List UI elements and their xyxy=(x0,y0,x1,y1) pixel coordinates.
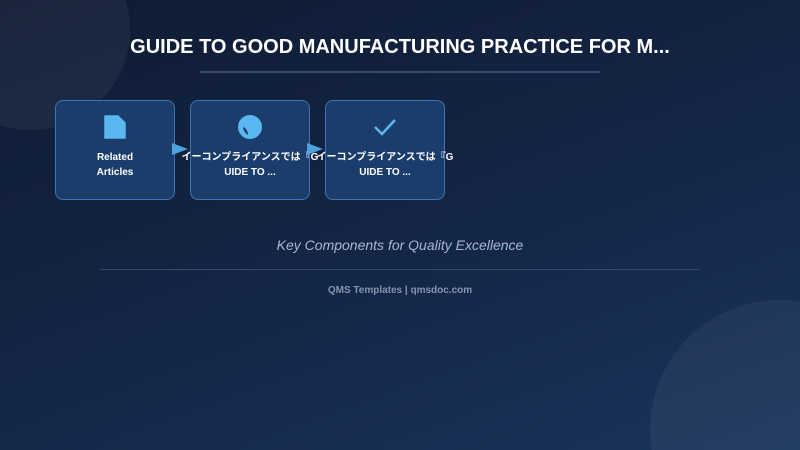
arrow xyxy=(172,143,188,155)
title: GUIDE TO GOOD MANUFACTURING PRACTICE FOR M... xyxy=(130,36,670,58)
panel: article 2 xyxy=(325,100,445,200)
subtitle: Key Components for Quality Excellence xyxy=(277,237,523,253)
text: article 1: イーコンプライアンスでは『G xyxy=(182,152,318,163)
text: article 2: UIDE TO ... xyxy=(359,167,411,178)
text: article 2: イーコンプライアンスでは『G xyxy=(317,152,453,163)
text: article 2 xyxy=(317,151,453,178)
panel: related articles xyxy=(55,100,175,200)
icon: check xyxy=(374,119,396,136)
footer: QMS Templates | qmsdoc.com xyxy=(328,285,472,296)
icon: document xyxy=(104,115,126,139)
text: article 1: UIDE TO ... xyxy=(224,167,276,178)
icon: globe xyxy=(238,115,262,139)
text: article 1 xyxy=(182,151,318,178)
arrow xyxy=(307,143,323,155)
panel: article 1 xyxy=(190,100,310,200)
text: related articles: Articles xyxy=(97,167,133,178)
text: related articles: Related xyxy=(97,152,133,163)
text: related articles xyxy=(96,152,133,178)
